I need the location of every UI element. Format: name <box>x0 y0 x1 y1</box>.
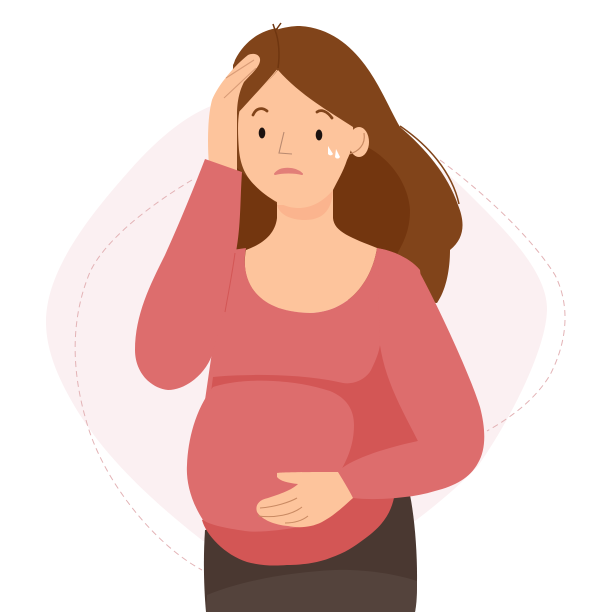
raised hand <box>208 54 260 172</box>
sleeve crease <box>225 253 235 312</box>
thin stray hair strand <box>400 126 459 204</box>
neck and chest <box>245 185 377 313</box>
background blob <box>46 99 547 541</box>
dashed outline right <box>440 160 565 431</box>
belly <box>187 381 354 532</box>
belly lower shadow <box>202 480 395 566</box>
hand on belly <box>256 472 353 527</box>
eye right <box>316 130 322 140</box>
mouth <box>275 169 302 174</box>
tear drops <box>328 146 340 159</box>
trousers <box>204 495 417 612</box>
eyebrow right <box>317 111 332 118</box>
sweater torso <box>205 248 440 480</box>
hair back <box>233 26 463 303</box>
nose <box>279 132 292 154</box>
dashed outline left <box>75 180 202 570</box>
hair fringe <box>232 23 281 115</box>
raised arm sleeve <box>135 159 242 390</box>
eye left <box>259 128 265 138</box>
ear <box>349 127 369 157</box>
face <box>238 70 353 208</box>
eyebrow left <box>253 109 267 115</box>
lower arm sleeve <box>338 248 484 499</box>
